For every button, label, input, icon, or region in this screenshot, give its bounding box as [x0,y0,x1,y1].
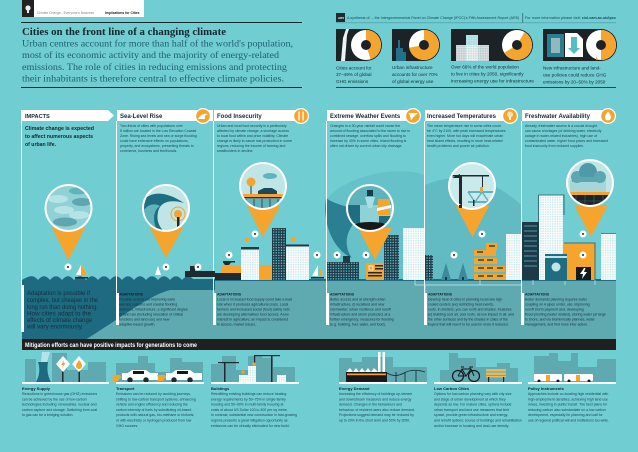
report synthesis strip: AR5 [338,16,344,20]
illustration: transport [112,356,203,383]
adaptations: food [213,292,292,326]
text: transport: vehicle and engine efficiency and reducing the [116,403,188,407]
boats and ships [75,265,215,278]
text: buildings: emissions can be virtually eliminated for new build. [211,424,290,428]
header: freshwater availability [522,108,616,124]
text: transport: or with electricity or hydrogen produced from low [116,418,192,422]
map pin: rain cloud [566,159,614,237]
adaptations: freshwater: ADAPTATIONS [525,292,550,296]
text: energy demand: Projections suggest demand may be reduced by [339,413,414,417]
header: impacts: IMPACTS [25,114,50,120]
text: impacts summary: of urban life. [25,142,56,148]
header: food insecurity [214,108,309,124]
text: low carbon cities: and/or increase in housing and land-use density. [434,424,509,428]
text: low carbon cities [434,386,522,428]
callout: adaptation summary: complex, but cheaper in the [27,298,99,304]
report tab: Climate Change - Everyone's Business [37,11,94,15]
ground outline [415,280,595,293]
text: extreme weather: increase by 40% in some cities. Inland flooding is [330,139,407,143]
text: low carbon cities: sprawl, provide green infrastructure and energy, [434,413,508,417]
adaptations: freshwater: management, and find more inter-action. [525,322,588,326]
text: transport: Transport [116,386,135,391]
text: policy instruments: Policy Instruments [528,386,565,391]
title block: most of its economic activity and the majority of energy-related [22,50,279,61]
text: transport: GHG sources. [116,424,138,428]
illustration: energy supply [25,352,106,382]
text: buildings [211,386,297,428]
adaptations: temperature: roofs, in shelters, you can roofs and shades. Features [428,308,512,312]
text: freshwater availability: outage in water-related industries), high use of [525,134,597,138]
text: low carbon cities: and retrofit options; source of buildings and rehabilitation [434,418,522,422]
adaptations: temperature: (e) Building cool air, cool roofs, as low impact in all, and [428,312,514,316]
adaptations: extreme weather: Better access and at strength urban [330,298,386,302]
header: sea-level rise [117,108,213,124]
header: sea-level rise: Sea-Level Rise [120,114,163,120]
text: increased temperatures: heat island effects, resulting in more heat-related [427,139,503,143]
banner: mitigation: Mitigation efforts can have positive impacts for generations to come [25,343,198,349]
text: buildings: In contrast, substantial new construction in fast-growing [211,413,297,417]
adaptations: temperature: ADAPTATIONS [428,292,453,296]
text: impacts summary: Climate change is expected [25,126,95,132]
header: food insecurity: Food Insecurity [217,114,262,120]
adaptations: temperature: buyers that will now if to be used in more it reduced. [428,322,509,326]
adaptations: freshwater: coupling on 4 pipes under, use, improving [525,302,590,306]
adaptations: temperature: cooled centers (ex) restricting heat events, [428,302,494,306]
title block: their inhabitants is therefore central to effective climate policies. [22,74,284,84]
adaptations: freshwater: to shore, and via biomimically planned, water [525,318,596,322]
adaptations: food: are developing alternatives food access. A low [217,312,289,316]
callout: adaptation summary [21,285,99,332]
callout: adaptation summary: Adaptation is possible if [27,291,90,297]
callout: adaptation summary: How cities adapt to the [27,312,92,318]
adaptations: sea-level: of land use (including relocation of critical [119,312,183,316]
text: buildings: regions presents a great mitigation opportunity as [211,418,288,422]
stat: new infrastructure: New infrastructure and land- [543,66,601,70]
adaptations: extreme weather: infrastructure, (i) localised and new [330,302,385,306]
adaptations: sea-level: functions and land use) and new [119,318,170,322]
text: food insecurity: to local food within and price volatility. Climate [217,134,288,138]
text: food insecurity: change is likely to cause lost production in some [217,139,292,143]
adaptations: freshwater: flood-proofing (water related), storing water (at large [525,312,606,316]
stat: urban infrastructure energy: Urban infrastructure [392,65,433,70]
adaptations: sea-level: defences, infrastructure, a significant degree [119,308,188,312]
header: freshwater availability: Freshwater Availability [525,114,591,120]
text: energy supply [22,386,97,417]
text: impacts summary [25,126,95,148]
text: energy supply: Reductions in greenhouse gas (GHG) emissions [22,392,97,396]
text: sea-level rise: Zone. Rising sea levels and sea or surge flooding [120,134,197,138]
text: freshwater availability [525,124,608,148]
text: energy demand: and downstream measures and reduce energy [339,397,412,401]
report synthesis strip [336,13,616,23]
adaptations: extreme weather [326,292,394,326]
header: impacts [22,110,114,121]
stat: urban population: to live in cities by 2050, significantly [451,72,524,76]
text: increased temperatures [427,124,506,148]
text: sea-level rise [120,124,197,153]
title block: Urban centres account for more than half of the world's population, [22,38,293,50]
adaptations: extreme weather: ADAPTATIONS [330,292,355,296]
text: freshwater availability: can cause shortages (of drinking water, electricity [525,129,602,133]
text: increased temperatures: be 4°C by 2100, with peak increased temperatures [427,129,506,133]
text: food insecurity: Urban and local food security is a particularly [217,124,287,128]
text: low carbon cities: Options for low-carbon planning vary with city size [434,392,512,396]
text: policy instruments: development, especially for planning and call for [528,413,604,417]
text: impacts summary: to affect numerous aspects [25,134,93,140]
adaptations: freshwater: runoff storm payment and, developing [525,308,584,312]
stat: urban population [451,29,534,84]
map pin: fish [44,184,92,260]
stat: urban infrastructure energy [392,29,440,84]
stat: urban population: Over 66% of the world population [451,64,519,70]
text: increased temperatures: health problems and poorer air pollution. [427,144,490,148]
adaptations: sea-level [116,292,188,326]
panel background scene [22,171,616,340]
text: increased temperatures: even higher. More hot days will exacerbate urban [427,134,503,138]
adaptations: sea-level: warning systems and coastal flooding [119,302,177,306]
text: transport: shifting to low-carbon transport systems, enhancing [116,397,196,401]
text: energy supply: can be achieved by the use of low-carbon [22,397,87,401]
adaptations: food: in access, market issues. [217,322,256,326]
adaptations: extreme weather: further emergency, measures for flooding [330,318,394,322]
map pin: construction crane [448,162,496,237]
adaptations: sea-level: Possible actions are improving early [119,298,175,302]
callout: adaptation summary: will vary enormously. [26,324,83,330]
stat: new infrastructure: emissions by 20–50% by 2050 [543,80,606,84]
text: freshwater availability: contaminated water, higher food prices and increased [525,139,608,143]
text: sea-level rise: 5 million are located in the Low Elevation Coastal [120,129,196,133]
text: extreme weather: combined sewage, overflow spills and flooding to [330,134,406,138]
text: energy supply: Energy Supply [22,386,51,391]
text: energy demand [339,386,415,422]
adaptations: extreme weather: (e.g. building, fuel, water, and food). [330,322,386,326]
text: energy supply: technologies including: renewables, nuclear and [22,403,97,407]
text: buildings: housing and 50–90% in multi-family housing at [211,403,283,407]
text: low carbon cities: urban transport and land use measures that limit [434,408,509,412]
text: food insecurity: regions, reducing the income of farming and [217,144,285,148]
text: sea-level rise: could have extensive effects on populations, [120,139,189,143]
text: freshwater availability: food insecurity from reduced supplies. [525,144,584,148]
text: buildings: Buildings [211,386,230,391]
header: extreme weather events [327,108,421,124]
adaptations: temperature: the other surfaces and by the shades in cities of the [428,318,508,322]
adaptations: sea-level: ADAPTATIONS [119,292,144,296]
map pin: wave and signal [142,184,190,258]
callout: adaptation summary: effects of climate change [27,318,93,324]
callout: adaptation summary: long run than doing nothing. [27,305,98,311]
adaptations: freshwater [521,292,606,326]
stat: urban infrastructure energy: accounts for over 70% [392,72,438,77]
text: energy supply: carbon capture and storage. Switching from coal [22,408,97,412]
text: food insecurity: affected by climate change, a shortage access [217,129,289,133]
header: extreme weather events: Extreme Weather Events [330,114,401,120]
text: buildings: Retrofitting existing buildings can reduce heating [211,392,286,396]
text: increased temperatures: The mean temperature rise in some cities could [427,124,501,128]
adaptations: freshwater: Better demands planning requires water [525,298,588,302]
report tab [22,0,144,17]
title block: emissions. The role of cities in reducing emissions and protecting [22,62,287,73]
stat: cities emissions [336,29,382,84]
title block: Cities on the front line of a changing climate [22,27,227,38]
text: low carbon cities: Low Carbon Cities [434,386,470,391]
adaptations: food: interest in agriculture; an impact is considered [217,318,288,322]
text: policy instruments [528,386,609,422]
adaptations: food: farmers and increased social (food) safety nets [217,308,290,312]
text: energy demand: behaviour of resident users also reduce demand. [339,408,415,412]
illustration: buildings [211,355,295,382]
report synthesis strip: For more information please visit: cisl.cam.ac.uk/ipcc [525,16,616,20]
stat: cities emissions: GHG emissions [336,79,369,84]
text: transport: Emissions can be reduced by avoiding journeys, [116,392,191,396]
title block [21,22,302,88]
text: energy demand: up to 20% in the short term and 50% by 2050. [339,418,410,422]
text: food insecurity: smallholders in decline. [217,149,253,153]
map pin: farm [239,162,287,237]
text: buildings: energy requirements by 50–75% in single-family [211,397,286,401]
illustration: low carbon cities [440,353,518,382]
banner: mitigation [22,339,616,350]
text: sea-level rise: property, and ecosystems, presenting threats to [120,144,194,148]
stat: cities emissions: Cities account for [336,66,372,70]
text: freshwater availability: Already, freshwater access is a crucial drought [525,124,597,128]
adaptations: extreme weather: infrastructure and storm protected, at a [330,312,390,316]
city: freshwater panel buildings [522,195,616,281]
text: transport [116,386,196,428]
city: temperature panel buildings [425,234,521,280]
adaptations: temperature: Develop heat of cities in planning local new sign [428,298,502,302]
text: low carbon cities: and stage of urban development at which they [434,397,506,401]
adaptations: extreme weather: stormwater; urban resilience and runoff [330,308,391,312]
text: extreme weather: often not driven by current urban city drainage. [330,144,402,148]
text: energy demand: Increasing the efficiency of buildings up-stream [339,392,412,396]
text: extreme weather: amount of flooding associated to the storm to rise in [330,129,410,133]
adaptations: temperature [424,292,514,326]
illustration: energy demand [339,352,427,382]
stat: urban population: increasing energy use for infrastructure [451,78,534,84]
text: sea-level rise: Two-thirds of cities with populations over [120,124,184,128]
text: transport: products with natural gas, bio-methane or biofuels, [116,413,194,417]
header: increased temperatures [425,108,518,124]
text: extreme weather [330,124,410,148]
base bars [22,382,616,384]
text: food insecurity [217,124,292,153]
text: energy supply: to gas can be a bridging solution. [22,413,73,417]
text: sea-level rise: commerce, business and livelihoods. [120,149,177,153]
stat: new infrastructure [543,29,617,84]
map pin: storm [346,184,394,260]
adaptations: food: role when it produces agricultural crops. Local [217,302,288,306]
text: energy demand: demand. Changes in the behaviours and [339,403,402,407]
text: extreme weather: Changes in a 30-year rainfall could cause the [330,124,400,128]
city: extreme weather panel buildings [327,228,424,280]
stat: cities emissions: 37–49% of global [336,72,372,77]
header: increased temperatures: Increased Temperatures [427,114,497,120]
location markers [64,230,586,270]
text: buildings: costs of about US Dollar 100 to 400 per sq metre. [211,408,288,412]
text: policy instruments: reducing carbon also substantiate on a low carbon [528,408,606,412]
report tab: Implications for Cities [105,11,140,15]
adaptations: sea-level: adaptive-based growth. [119,322,155,326]
city: food panel buildings [215,228,324,280]
text: policy instruments: mixes, investing in public transit. The best plans for [528,403,608,407]
adaptations: food: ADAPTATIONS [217,292,242,296]
adaptations: food: Local or increased food supply could take a lead [217,298,292,302]
text: policy instruments: Approaches include co-locating high residential with [528,392,608,396]
text: transport: carbon intensity of fuels by substituting oil-based [116,408,191,412]
text: energy demand: Energy Demand [339,386,370,391]
text: policy instruments: use of regional political will and institutions too-wide. [528,418,609,422]
text: policy instruments: high employment densities, achieving high land use [528,397,608,401]
stat: urban infrastructure energy: of global energy use [392,79,434,84]
illustration: policy instruments [534,353,616,382]
text: low carbon cities: depends as low. For mature cities, options include [434,403,511,407]
panel rules [21,110,522,293]
stat: new infrastructure: use policies could reduce GHG [543,72,607,78]
report synthesis strip: A synthesis of ... the Intergovernmental Panel on Climate Change (IPCC)'s Fifth Assessment Report (AR5) [347,16,519,20]
